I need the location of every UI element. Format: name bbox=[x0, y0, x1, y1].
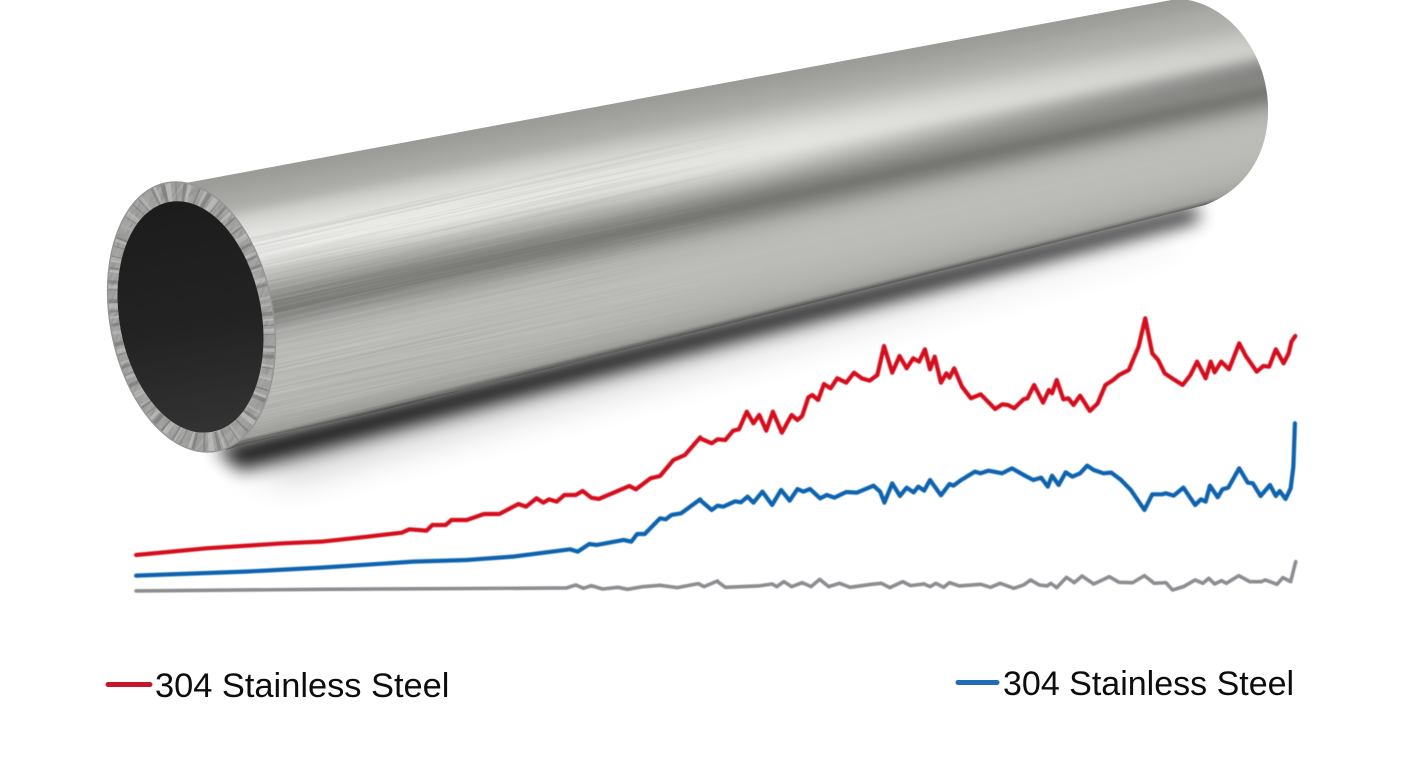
legend: red series: 304 Stainless Steel bbox=[155, 667, 449, 705]
grey series bbox=[136, 562, 1296, 591]
dark lower edge of tube bbox=[225, 197, 1221, 450]
blue series bbox=[136, 423, 1295, 576]
red series bbox=[136, 318, 1295, 555]
legend: blue series: 304 Stainless Steel bbox=[1003, 665, 1294, 703]
tube interior bbox=[99, 189, 282, 445]
rim outer edge bbox=[86, 168, 297, 466]
cast shadow under tube bbox=[215, 206, 1200, 478]
tube end rim bbox=[107, 182, 275, 452]
highlight and shade overlays bbox=[234, 155, 581, 256]
brushed metal texture bbox=[226, 151, 703, 450]
infographic: stainless steel tube and trend chart bbox=[106, 0, 1298, 698]
line chart bbox=[136, 318, 1296, 591]
tube opening bbox=[106, 181, 276, 453]
metal shading bands bbox=[188, 0, 1268, 436]
steel tube body bbox=[177, 0, 1268, 450]
